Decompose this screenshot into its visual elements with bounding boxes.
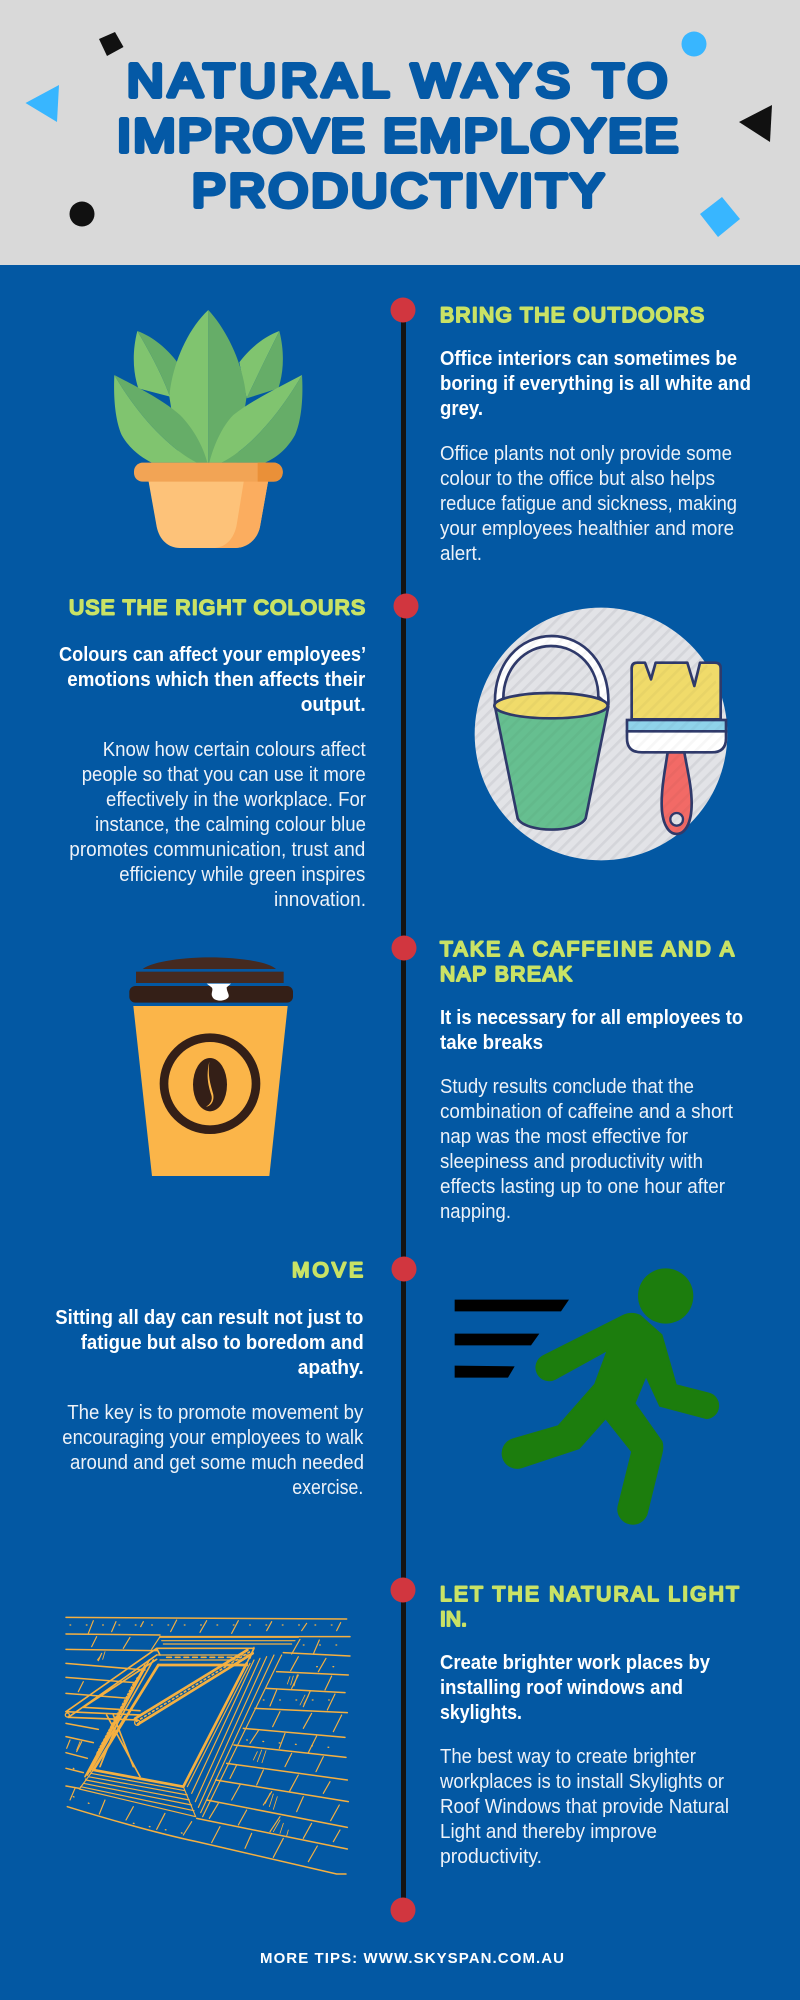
panel: use the right colours bbox=[59, 596, 366, 911]
body text: people so that you can use it more bbox=[82, 763, 366, 786]
body text: reduce fatigue and sickness, making bbox=[440, 492, 737, 515]
body text: around and get some much needed bbox=[70, 1451, 364, 1474]
body text: exercise. bbox=[292, 1476, 363, 1499]
heading: LET THE NATURAL LIGHT bbox=[440, 1583, 739, 1606]
panel: move bbox=[55, 1259, 364, 1499]
lead text: skylights. bbox=[440, 1702, 522, 1724]
body text: instance, the calming colour blue bbox=[95, 813, 366, 836]
body text: The best way to create brighter bbox=[440, 1745, 696, 1768]
lead text: Create brighter work places by bbox=[440, 1652, 711, 1674]
icon: black triangle bbox=[739, 105, 772, 142]
body text: Study results conclude that the bbox=[440, 1075, 694, 1098]
body text: alert. bbox=[440, 542, 482, 565]
body text: promotes communication, trust and bbox=[69, 838, 365, 861]
lead text: Office interiors can sometimes be bbox=[440, 348, 737, 370]
body text: your employees healthier and more bbox=[440, 517, 734, 540]
body text: napping. bbox=[440, 1200, 511, 1223]
lead text bbox=[55, 1307, 364, 1379]
icon: blue circle bbox=[682, 32, 706, 56]
heading: TAKE A CAFFEINE AND A bbox=[440, 938, 734, 961]
panel: take a caffeine and a nap break bbox=[440, 938, 743, 1223]
icon: roof skylight line drawing bbox=[65, 1617, 350, 1874]
body text: efficiency while green inspires bbox=[119, 863, 365, 886]
body text: effectively in the workplace. For bbox=[106, 788, 366, 811]
heading bbox=[440, 1583, 739, 1631]
body text: Light and thereby improve bbox=[440, 1820, 657, 1843]
body text: productivity. bbox=[440, 1845, 542, 1868]
icon: black circle bbox=[70, 202, 94, 226]
lead text: take breaks bbox=[440, 1032, 543, 1054]
body text bbox=[69, 738, 366, 911]
body text: Office plants not only provide some bbox=[440, 442, 732, 465]
icon: blue diamond bbox=[700, 197, 740, 237]
lead text: apathy. bbox=[298, 1357, 364, 1379]
body text bbox=[440, 442, 737, 565]
heading: MOVE bbox=[292, 1259, 363, 1282]
scissor stays bbox=[93, 1715, 140, 1777]
open sash bbox=[65, 1647, 254, 1725]
body text bbox=[439, 1745, 729, 1868]
lead text: boring if everything is all white and bbox=[440, 373, 751, 395]
lead text: emotions which then affects their bbox=[67, 669, 365, 691]
heading: NAP BREAK bbox=[440, 963, 572, 986]
icon: coffee cup bbox=[129, 957, 293, 1176]
title: IMPROVE EMPLOYEE bbox=[117, 111, 678, 162]
title bbox=[117, 56, 678, 217]
lead text: installing roof windows and bbox=[440, 1677, 683, 1699]
lead text bbox=[59, 644, 366, 716]
body text: nap was the most effective for bbox=[440, 1125, 688, 1148]
heading: IN. bbox=[440, 1608, 467, 1631]
icon: black diamond bbox=[99, 32, 124, 56]
lead text: grey. bbox=[440, 398, 483, 420]
panel: let the natural light in bbox=[439, 1583, 739, 1868]
panel: bring the outdoors bbox=[440, 304, 751, 565]
lead text: output. bbox=[301, 694, 366, 716]
lead text: It is necessary for all employees to bbox=[440, 1007, 743, 1029]
body text: Roof Windows that provide Natural bbox=[440, 1795, 729, 1818]
heading bbox=[440, 938, 734, 986]
title: NATURAL WAYS TO bbox=[127, 56, 667, 107]
timeline bbox=[390, 298, 418, 1922]
icon: running figure bbox=[455, 1268, 718, 1524]
lead text: Sitting all day can result not just to bbox=[55, 1307, 363, 1329]
panel: header banner bbox=[0, 0, 800, 265]
lead text bbox=[440, 1652, 711, 1724]
lead text bbox=[440, 1007, 743, 1054]
title: PRODUCTIVITY bbox=[192, 166, 604, 217]
body text: Know how certain colours affect bbox=[103, 738, 366, 761]
heading: BRING THE OUTDOORS bbox=[440, 304, 704, 327]
body text: effects lasting up to one hour after bbox=[440, 1175, 725, 1198]
window curb bbox=[79, 1637, 298, 1817]
body text bbox=[440, 1075, 733, 1223]
body text: The key is to promote movement by bbox=[67, 1401, 364, 1424]
icon: blue triangle bbox=[26, 85, 59, 122]
footer text: MORE TIPS: WWW.SKYSPAN.COM.AU bbox=[260, 1950, 564, 1967]
icon: potted plant bbox=[114, 310, 302, 548]
body text bbox=[62, 1401, 364, 1499]
body text: encouraging your employees to walk bbox=[62, 1426, 364, 1449]
body text: combination of caffeine and a short bbox=[440, 1100, 733, 1123]
body text: colour to the office but also helps bbox=[440, 467, 715, 490]
lead text: Colours can affect your employees’ bbox=[59, 644, 366, 666]
body text: innovation. bbox=[274, 888, 366, 911]
body text: workplaces is to install Skylights or bbox=[439, 1770, 724, 1793]
lead text bbox=[440, 348, 751, 420]
lead text: fatigue but also to boredom and bbox=[81, 1332, 364, 1354]
heading: USE THE RIGHT COLOURS bbox=[69, 596, 365, 620]
body text: sleepiness and productivity with bbox=[440, 1150, 703, 1173]
icon: paint bucket and brush bbox=[475, 608, 727, 860]
